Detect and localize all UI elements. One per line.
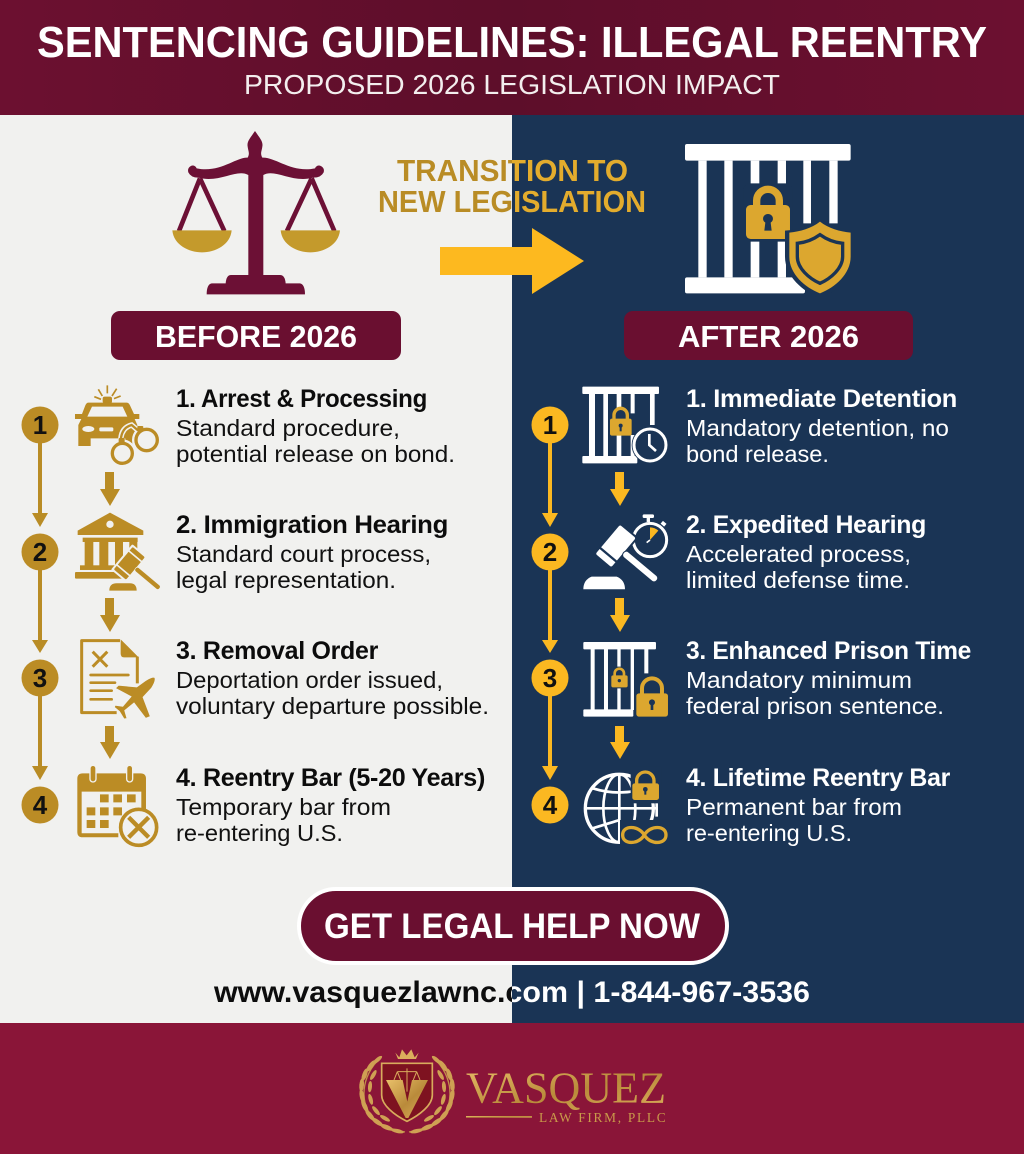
icon: calendar with cross — [77, 765, 157, 845]
tagline: LAW FIRM, PLLC — [539, 1110, 666, 1125]
text: before step 3: voluntary departure possible. — [176, 693, 489, 719]
text: after step 2: limited defense time. — [686, 567, 910, 593]
text: before step 1 — [176, 385, 455, 467]
text: after step 1: Mandatory detention, no — [686, 415, 949, 441]
icon: jail with padlock and shield — [685, 144, 855, 298]
text: after step 2: Accelerated process, — [686, 541, 911, 567]
rule — [466, 1116, 532, 1118]
text: before step 2 — [176, 511, 448, 593]
timeline: after steps 1-4: 1 — [543, 410, 557, 440]
subtitle: PROPOSED 2026 LEGISLATION IMPACT — [244, 69, 780, 100]
icon: laurel wreath — [359, 1055, 455, 1134]
timeline: before steps 1-4: 4 — [33, 790, 48, 820]
heading: transition to new legislation: NEW LEGISLATION — [378, 184, 646, 219]
icon: scales of justice — [172, 131, 340, 294]
text: before step 4: re-entering U.S. — [176, 820, 343, 846]
text: before step 4: Temporary bar from — [176, 794, 391, 820]
arrows: between before icons — [100, 472, 120, 759]
text: after step 3: federal prison sentence. — [686, 693, 944, 719]
icon: shield with V — [382, 1063, 432, 1121]
timeline: before steps 1-4: 2 — [33, 537, 47, 567]
heading: transition to new legislation — [378, 153, 646, 219]
label: after 2026: AFTER 2026 — [678, 319, 859, 354]
text: after step 1: bond release. — [686, 441, 829, 467]
text: after step 4: re-entering U.S. — [686, 820, 852, 846]
icon: jail with large padlock — [583, 642, 670, 719]
button: get legal help now — [299, 889, 727, 963]
timeline: after steps 1-4: 2 — [543, 537, 557, 567]
text: after step 4: 4. Lifetime Reentry Bar — [686, 764, 951, 792]
title: SENTENCING GUIDELINES: ILLEGAL REENTRY — [37, 18, 987, 67]
text: after step 1: 1. Immediate Detention — [686, 385, 957, 413]
label: before 2026: BEFORE 2026 — [155, 319, 357, 354]
icon: police car and handcuffs — [75, 385, 161, 467]
text: before step 3: Deportation order issued, — [176, 667, 443, 693]
icon: crown — [395, 1049, 419, 1059]
text: after step 2 — [686, 511, 926, 593]
icon: globe, padlock and infinity — [585, 767, 670, 848]
text: before step 4 — [176, 764, 485, 846]
icon: removal order document with plane — [82, 639, 155, 719]
header band — [0, 0, 1024, 115]
text: after step 4 — [686, 764, 951, 846]
timeline: after steps 1-4: 4 — [543, 790, 558, 820]
timeline: after steps 1-4: 3 — [543, 663, 557, 693]
wordmark: VASQUEZ — [466, 1064, 666, 1113]
text: before step 2: 2. Immigration Hearing — [176, 511, 448, 539]
text: before step 1: 1. Arrest & Processing — [176, 385, 427, 413]
button: get legal help now: GET LEGAL HELP NOW — [324, 907, 700, 946]
logo: Vasquez Law Firm — [359, 1049, 666, 1134]
icon: gavel and stopwatch — [583, 514, 670, 597]
text: before step 2: legal representation. — [176, 567, 396, 593]
text: before step 3: 3. Removal Order — [176, 637, 379, 665]
timeline: before steps 1-4 — [22, 406, 58, 824]
text: before step 2: Standard court process, — [176, 541, 431, 567]
text: before step 1: Standard procedure, — [176, 415, 400, 441]
arrow: transition — [440, 228, 584, 294]
timeline: after steps 1-4 — [532, 406, 568, 824]
text: before step 4: 4. Reentry Bar (5-20 Years) — [176, 764, 485, 792]
text: after step 3: Mandatory minimum — [686, 667, 912, 693]
timeline: before steps 1-4: 1 — [33, 410, 47, 440]
footer band — [0, 1023, 1024, 1154]
arrows: between after icons — [610, 472, 630, 759]
text: after step 1 — [686, 385, 957, 467]
label: before 2026 — [111, 311, 401, 360]
panel: before background — [0, 115, 512, 1023]
timeline: before steps 1-4: 3 — [33, 663, 47, 693]
text: after step 3: 3. Enhanced Prison Time — [686, 637, 971, 665]
text: after step 4: Permanent bar from — [686, 794, 902, 820]
panel: after background — [512, 115, 1024, 1023]
text: after step 3 — [686, 637, 971, 719]
icon: jail with padlock and clock — [582, 387, 666, 463]
label: after 2026 — [624, 311, 913, 360]
icon: courthouse and gavel — [75, 513, 170, 601]
text: after step 2: 2. Expedited Hearing — [686, 511, 926, 539]
text: before step 1: potential release on bond. — [176, 441, 455, 467]
contact details: www.vasquezlawnc.com | 1-844-967-3536 — [213, 976, 810, 1009]
text: before step 3 — [176, 637, 489, 719]
heading: transition to new legislation: TRANSITION TO — [397, 153, 628, 188]
